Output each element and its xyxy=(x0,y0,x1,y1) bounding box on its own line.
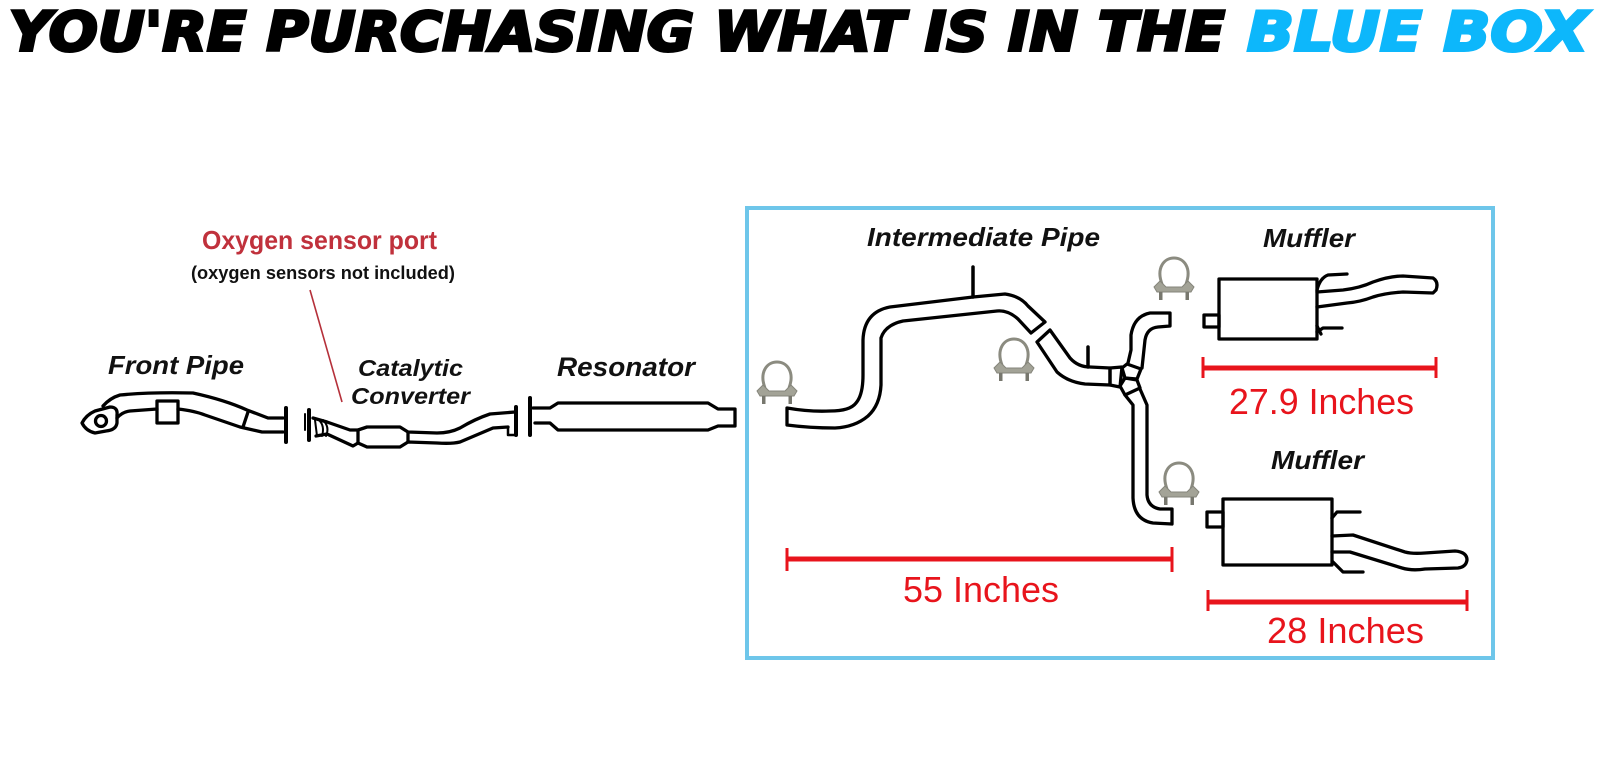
callout: oxygen sensor port xyxy=(191,225,455,402)
diagram: muffler lower xyxy=(1207,499,1467,572)
callout: oxygen sensor port: Oxygen sensor port xyxy=(202,225,437,255)
diagram: front pipe xyxy=(82,393,286,442)
diagram: catalytic converter xyxy=(305,407,516,447)
label: catalytic converter xyxy=(351,355,471,409)
dimension: 28 inches: 28 Inches xyxy=(1267,610,1424,651)
title: YOU'RE PURCHASING WHAT IS IN THE xyxy=(9,0,1225,64)
label: resonator: Resonator xyxy=(557,352,697,382)
title: BLUE BOX xyxy=(1247,0,1591,64)
dimension: 27.9 inches: 27.9 Inches xyxy=(1229,381,1414,422)
dimension: 27.9 inches xyxy=(1203,357,1436,422)
diagram: resonator xyxy=(530,398,735,435)
label: catalytic converter: Catalytic xyxy=(358,355,463,381)
label: muffler upper: Muffler xyxy=(1263,223,1357,253)
dimension: 55 inches xyxy=(787,547,1172,610)
icon: clamp 1 xyxy=(757,362,797,404)
dimension: 28 inches xyxy=(1207,590,1467,651)
label: intermediate pipe: Intermediate Pipe xyxy=(867,222,1100,252)
panel: blue box xyxy=(747,208,1493,658)
label: front pipe: Front Pipe xyxy=(108,350,244,380)
icon: clamp 2 xyxy=(994,339,1034,381)
diagram: muffler upper xyxy=(1204,274,1437,339)
dimension: 55 inches: 55 Inches xyxy=(903,569,1059,610)
label: muffler lower: Muffler xyxy=(1271,445,1366,475)
label: catalytic converter: Converter xyxy=(351,383,471,409)
icon: clamp 4 xyxy=(1159,463,1199,505)
callout: oxygen sensor port: (oxygen sensors not included) xyxy=(191,263,455,283)
diagram: intermediate pipe xyxy=(787,267,1172,524)
icon: clamp 3 xyxy=(1154,258,1194,300)
